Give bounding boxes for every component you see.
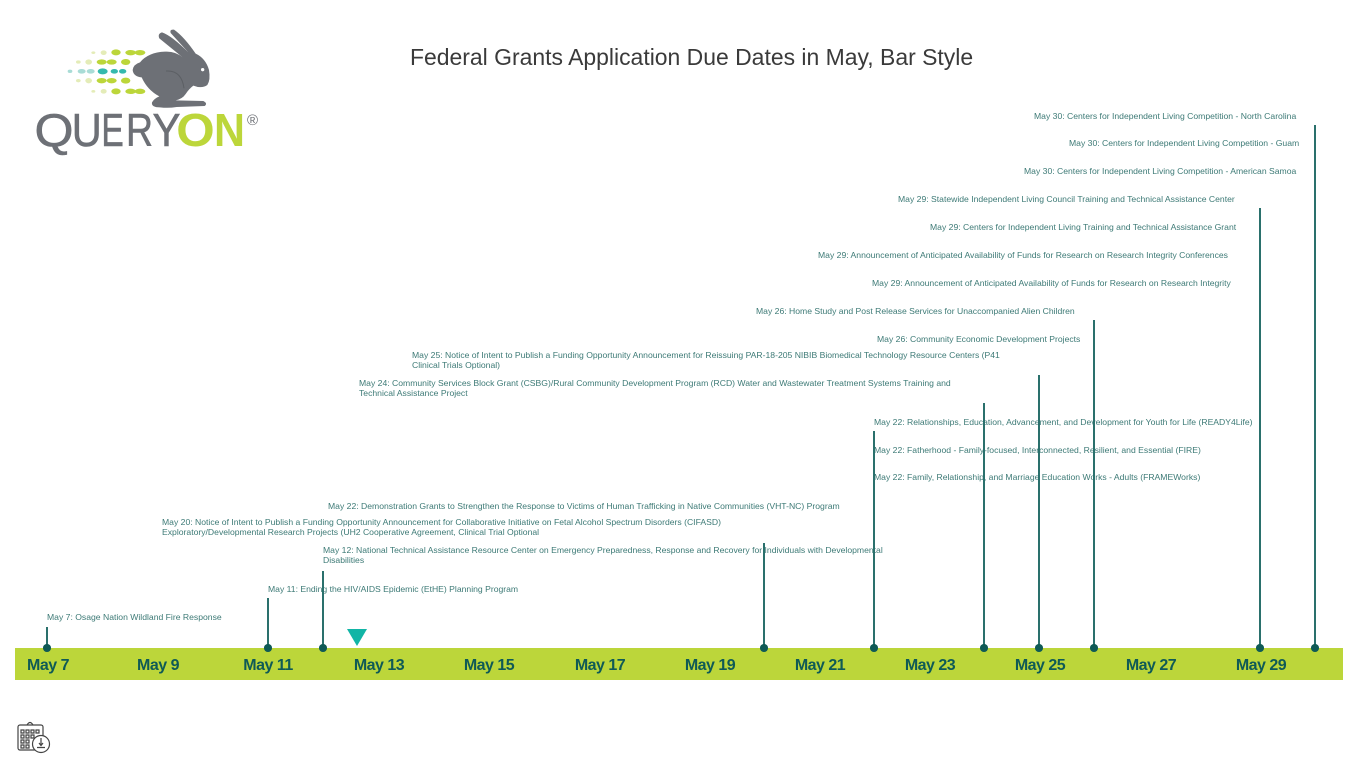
label: May 22 FRAMEWorks: May 22: Family, Relationship, and Marriage Education Works - Adults (FRAMEWorks) xyxy=(874,472,1200,482)
icon: rabbit xyxy=(133,30,210,108)
date axis labels: May 9 xyxy=(137,657,179,674)
logo: QueryOn rabbit xyxy=(34,30,258,156)
date axis labels: May 21 xyxy=(795,657,845,674)
label: May 29 Statewide: May 29: Statewide Independent Living Council Training and Technical Assistance Center xyxy=(898,194,1235,204)
label: May 25 NIBIB xyxy=(412,350,1000,370)
logo wordmark: Y xyxy=(152,104,180,156)
label: May 24 CSBG xyxy=(359,378,951,398)
logo wordmark: R xyxy=(126,104,153,156)
label: May 30 Guam: May 30: Centers for Independent Living Competition - Guam xyxy=(1069,138,1299,148)
label: May 24 CSBG: May 24: Community Services Block Grant (CSBG)/Rural Community Development Program (RCD) Water and Wastewater Treatment Systems Training and xyxy=(359,378,951,388)
registered mark: ® xyxy=(247,112,258,129)
label: May 20 CIFASD xyxy=(162,516,721,536)
label: May 26 Community Economic: May 26: Community Economic Development Projects xyxy=(877,334,1080,344)
title: Federal Grants Application Due Dates in May, Bar Style xyxy=(410,44,973,70)
date axis labels: May 19 xyxy=(685,657,735,674)
date axis labels: May 25 xyxy=(1015,657,1065,674)
label: May 20 CIFASD: May 20: Notice of Intent to Publish a Funding Opportunity Announcement for Collaborative Initiative on Fetal Alcohol Spectrum Disorders (CIFASD) xyxy=(162,516,721,526)
logo wordmark: N xyxy=(214,104,245,156)
logo wordmark: O xyxy=(176,104,215,156)
date axis labels: May 7 xyxy=(27,657,69,674)
label: May 12 Emergency Preparedness: May 12: National Technical Assistance Resource Center on Emergency Preparedness, Response and Recovery for Individuals with Developmental xyxy=(323,545,883,555)
label: May 26 Home Study: May 26: Home Study and Post Release Services for Unaccompanied Alien Children xyxy=(756,306,1075,316)
label: May 7 Osage: May 7: Osage Nation Wildland Fire Response xyxy=(47,612,222,622)
label: May 22 READY4Life: May 22: Relationships, Education, Advancement, and Development for Youth for Life (READY4Life) xyxy=(874,416,1253,426)
icon: speed dots xyxy=(68,49,145,94)
date axis labels: May 23 xyxy=(905,657,955,674)
label: May 22 VHT-NC: May 22: Demonstration Grants to Strengthen the Response to Victims of Human Trafficking in Native Communities (VHT-NC) Program xyxy=(328,500,840,510)
label: May 30 American Samoa: May 30: Centers for Independent Living Competition - American Samoa xyxy=(1024,166,1296,176)
timeline bar xyxy=(15,648,1343,680)
label: May 12 Emergency Preparedness xyxy=(323,545,883,565)
label: May 12 Emergency Preparedness: Disabilities xyxy=(323,555,364,565)
date axis labels: May 13 xyxy=(354,657,404,674)
date axis labels: May 15 xyxy=(464,657,514,674)
logo wordmark: Q xyxy=(34,104,74,156)
logo wordmark xyxy=(34,104,245,156)
label: May 29 Centers: May 29: Centers for Independent Living Training and Technical Assistance Grant xyxy=(930,222,1236,232)
label: May 11 EtHE: May 11: Ending the HIV/AIDS Epidemic (EtHE) Planning Program xyxy=(268,584,518,594)
logo wordmark: U xyxy=(72,104,102,156)
date axis labels: May 11 xyxy=(243,657,293,674)
icon: calendar download xyxy=(17,722,50,754)
date axis labels: May 27 xyxy=(1126,657,1176,674)
today marker arrow xyxy=(347,629,367,646)
label: May 22 FIRE: May 22: Fatherhood - Family-focused, Interconnected, Resilient, and Essential (FIRE) xyxy=(874,444,1201,454)
label: May 30 North Carolina: May 30: Centers for Independent Living Competition - North Carolina xyxy=(1034,110,1296,120)
label: May 20 CIFASD: Exploratory/Developmental Research Projects (UH2 Cooperative Agreement, Clinical Trial Optional xyxy=(162,526,539,536)
date axis labels: May 29 xyxy=(1236,657,1286,674)
label: May 24 CSBG: Technical Assistance Project xyxy=(359,388,468,398)
label: May 29 Conferences: May 29: Announcement of Anticipated Availability of Funds for Research on Research Integrity Conferences xyxy=(818,250,1228,260)
label: May 25 NIBIB: Clinical Trials Optional) xyxy=(412,360,500,370)
logo wordmark: E xyxy=(101,104,124,156)
label: May 25 NIBIB: May 25: Notice of Intent to Publish a Funding Opportunity Announcement for Reissuing PAR-18-205 NIBIB Biomedical Technology Resource Centers (P41 xyxy=(412,350,1000,360)
date axis labels xyxy=(27,657,1286,674)
label: May 29 Integrity: May 29: Announcement of Anticipated Availability of Funds for Research on Research Integrity xyxy=(872,278,1231,288)
date axis labels: May 17 xyxy=(575,657,625,674)
